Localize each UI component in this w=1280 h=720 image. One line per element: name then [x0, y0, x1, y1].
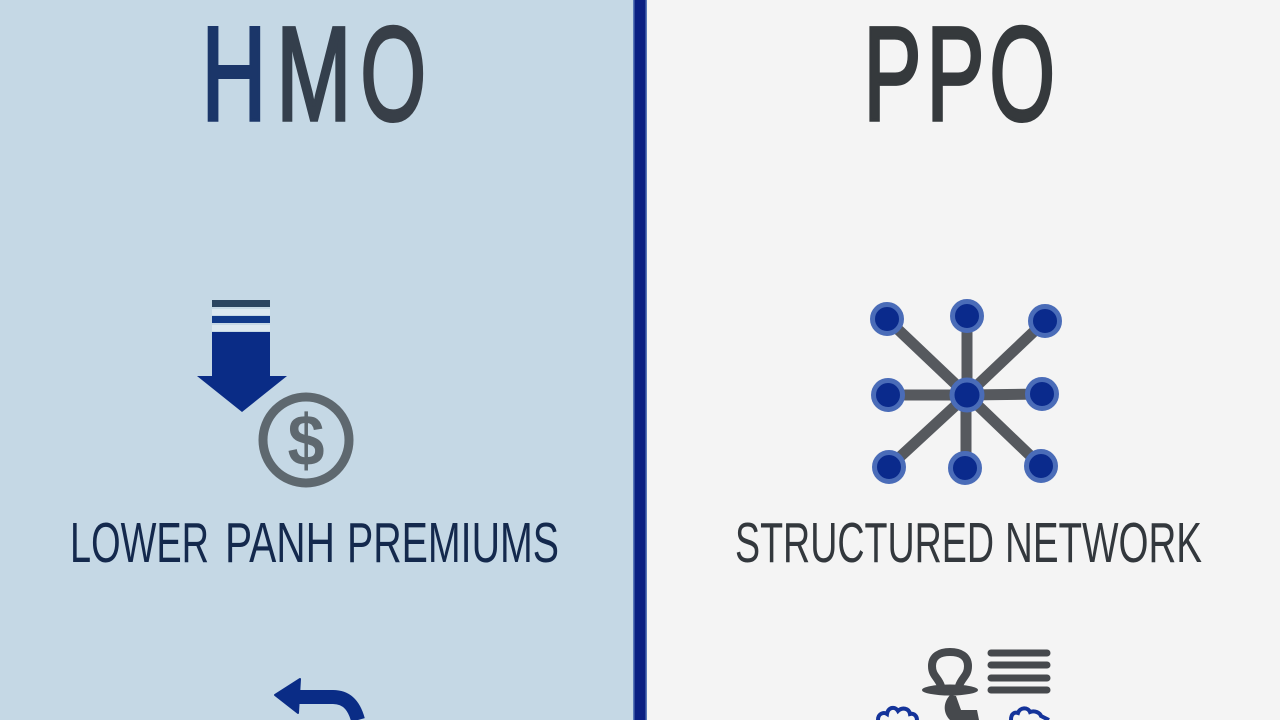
- icon: lower premium arrow and dollar coin: $: [288, 399, 324, 481]
- label: lower premiums: [70, 511, 559, 575]
- panel: PPO: [735, 0, 1202, 720]
- heading: HMO: H: [202, 0, 266, 149]
- panel: HMO: [0, 0, 635, 720]
- label: structured network: STRUCTURED: [735, 511, 994, 575]
- icon: person with list and hands: [878, 652, 1049, 720]
- heading: PPO: [863, 0, 1055, 149]
- label: lower premiums: LOWER: [70, 511, 209, 575]
- heading: PPO: P: [863, 0, 921, 148]
- icon: lower premium arrow and dollar coin: [197, 300, 349, 483]
- icon: return arrow: [275, 679, 358, 720]
- icon: structured network: [872, 302, 1060, 482]
- heading: HMO: M: [276, 0, 352, 149]
- heading: HMO: O: [360, 0, 426, 149]
- heading: PPO: P: [926, 0, 984, 148]
- label: lower premiums: PREMIUMS: [347, 511, 559, 575]
- heading: HMO: [202, 0, 426, 149]
- heading: PPO: O: [989, 0, 1055, 149]
- label: lower premiums: PANH: [225, 511, 335, 575]
- divider: [633, 0, 647, 720]
